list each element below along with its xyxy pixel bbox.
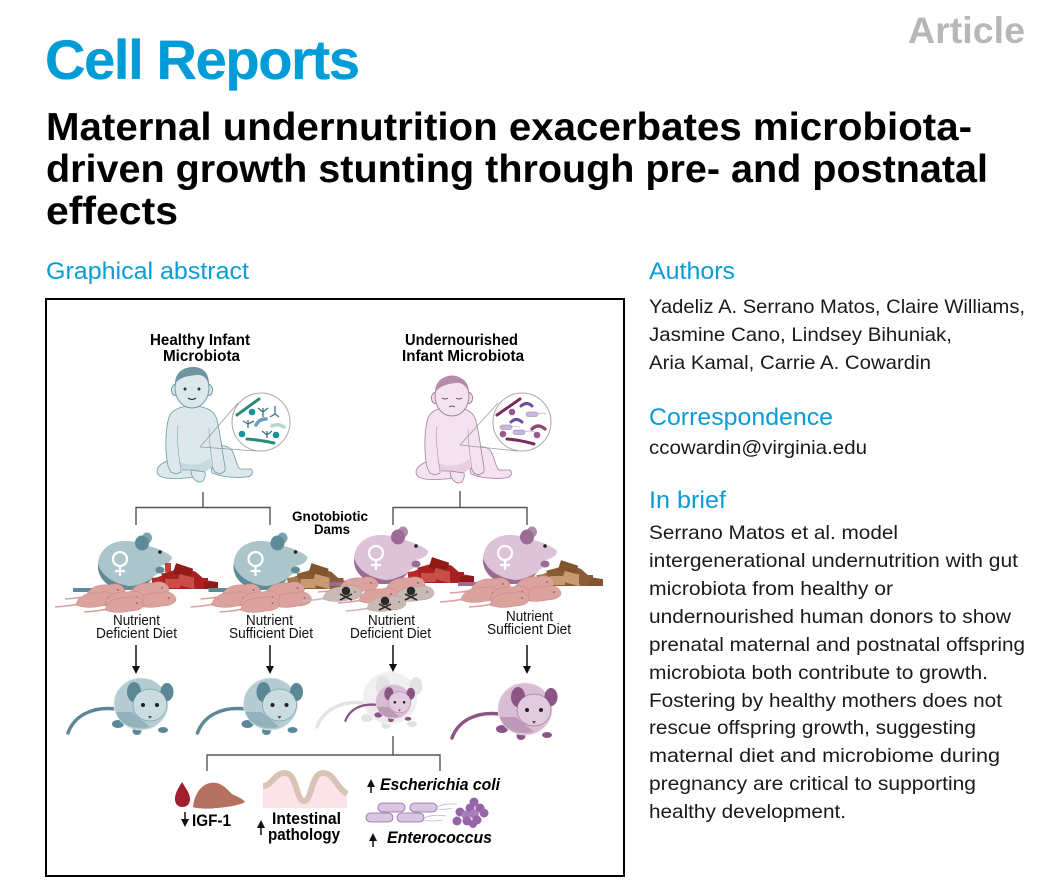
- arrow: diet 1 to offspring: [135, 645, 137, 670]
- arrow: diet 3 to offspring: [392, 645, 394, 668]
- text block: in brief summary: intergenerational undernutrition with gut: [649, 550, 1019, 572]
- heading: in brief: In brief: [649, 487, 726, 514]
- icon: offspring mouse 2: [198, 678, 303, 735]
- text block: in brief summary: rescue offspring growth, suggesting: [649, 717, 976, 739]
- bracket: outcomes: [207, 736, 440, 771]
- text block: authors: [649, 296, 1025, 374]
- heading: undernourished infant microbiota: Undernourished: [405, 332, 518, 349]
- text block: authors: Jasmine Cano, Lindsey Bihuniak,: [649, 324, 952, 346]
- bracket: healthy infant to dams: [136, 492, 270, 525]
- arrow: diet 2 to offspring: [269, 645, 271, 670]
- text block: in brief summary: [649, 522, 1025, 823]
- arrow: diet 4 to offspring: [526, 645, 528, 670]
- heading: authors: Authors: [649, 258, 735, 285]
- icon: healthy infant: [157, 367, 252, 482]
- text block: email: ccowardin@virginia.edu: [649, 437, 867, 459]
- label: nutrient deficient diet 1: Deficient Diet: [96, 626, 177, 642]
- label: IGF-1: IGF-1: [192, 811, 231, 830]
- text block: authors: Yadeliz A. Serrano Matos, Claire Williams,: [649, 296, 1025, 318]
- label: escherichia coli: Escherichia coli: [380, 776, 500, 794]
- icon: ghost normal-size mouse: [317, 672, 422, 729]
- heading: healthy infant microbiota: [150, 332, 250, 365]
- label: intestinal pathology: pathology: [268, 825, 340, 844]
- icon: undernourished microbiota magnifier: [460, 393, 551, 451]
- text block: in brief summary: undernourished human donors to show: [649, 606, 1012, 628]
- text block: in brief summary: maternal diet and microbiome during: [649, 745, 1000, 767]
- bracket: undernourished infant to dams: [393, 491, 527, 525]
- label: gnotobiotic dams: [292, 509, 368, 537]
- arrow: enterococcus up: [372, 837, 374, 847]
- label: nutrient deficient diet 2: [350, 613, 431, 642]
- arrow: intestinal pathology up: [260, 824, 262, 835]
- arrow: escherichia coli up: [370, 783, 372, 793]
- label: gnotobiotic dams: Dams: [314, 522, 350, 537]
- article label: Article: [908, 10, 1025, 51]
- label: nutrient sufficient diet 2: [487, 609, 571, 638]
- icon: healthy microbiota magnifier: [200, 393, 290, 451]
- label: nutrient deficient diet 2: Nutrient: [368, 613, 415, 629]
- icon: intestine villi: [263, 773, 347, 808]
- title: [46, 106, 988, 233]
- arrow: IGF-1 down: [184, 812, 186, 823]
- label: nutrient sufficient diet 2: Sufficient Diet: [487, 622, 571, 638]
- title: driven growth stunting through pre- and postnatal: [46, 148, 988, 191]
- icon: rod bacteria: [366, 803, 457, 822]
- label: nutrient sufficient diet 2: Nutrient: [506, 609, 553, 625]
- label: nutrient deficient diet 2: Deficient Diet: [350, 626, 431, 642]
- text block: in brief summary: prenatal maternal and postnatal offspring: [649, 634, 1025, 656]
- text block: in brief summary: Fostering by healthy mothers does not: [649, 690, 1003, 712]
- label: intestinal pathology: [268, 809, 341, 844]
- title: Maternal undernutrition exacerbates microbiota-: [46, 106, 972, 149]
- heading: graphical abstract: Graphical abstract: [46, 258, 249, 285]
- title: effects: [46, 190, 178, 233]
- text block: authors: Aria Kamal, Carrie A. Cowardin: [649, 352, 931, 374]
- label: enterococcus: Enterococcus: [387, 829, 492, 847]
- icon: liver: [193, 783, 245, 809]
- icon: dam 2 with brown food and pups: [190, 532, 354, 612]
- icon: offspring mouse 4: [452, 683, 558, 740]
- heading: correspondence: Correspondence: [649, 404, 833, 431]
- label: gnotobiotic dams: Gnotobiotic: [292, 509, 368, 524]
- text block: in brief summary: microbiota from healthy or: [649, 578, 894, 600]
- icon: dam 3 with red food, pups and skulls: [302, 526, 474, 611]
- text block: in brief summary: healthy development.: [649, 801, 846, 823]
- text block: in brief summary: microbiota both contribute to growth.: [649, 662, 988, 684]
- label: intestinal pathology: Intestinal: [272, 809, 341, 828]
- panel: graphical abstract: [46, 299, 624, 876]
- heading: healthy infant microbiota: Healthy Infant: [150, 332, 250, 349]
- journal logo: Cell Reports: [45, 28, 360, 91]
- icon: undernourished infant: [416, 376, 511, 483]
- label: nutrient sufficient diet 1: [229, 613, 313, 642]
- icon: cocci cluster: [452, 798, 488, 828]
- label: nutrient deficient diet 1: [96, 613, 177, 642]
- label: nutrient sufficient diet 1: Nutrient: [246, 613, 293, 629]
- text block: in brief summary: Serrano Matos et al. model: [649, 522, 898, 544]
- icon: stunted mouse: [345, 684, 415, 722]
- icon: dam 4 with brown food and pups: [440, 526, 603, 607]
- text block: in brief summary: pregnancy are critical to supporting: [649, 773, 976, 795]
- heading: healthy infant microbiota: Microbiota: [163, 348, 240, 365]
- icon: skulls: [340, 587, 417, 610]
- heading: undernourished infant microbiota: [402, 332, 524, 365]
- icon: blood drop: [175, 782, 190, 807]
- icon: offspring mouse 1: [68, 678, 174, 735]
- label: nutrient deficient diet 1: Nutrient: [113, 613, 160, 629]
- icon: dam 1 with red food and pups: [55, 532, 218, 612]
- heading: undernourished infant microbiota: Infant Microbiota: [402, 348, 524, 365]
- label: nutrient sufficient diet 1: Sufficient Diet: [229, 626, 313, 642]
